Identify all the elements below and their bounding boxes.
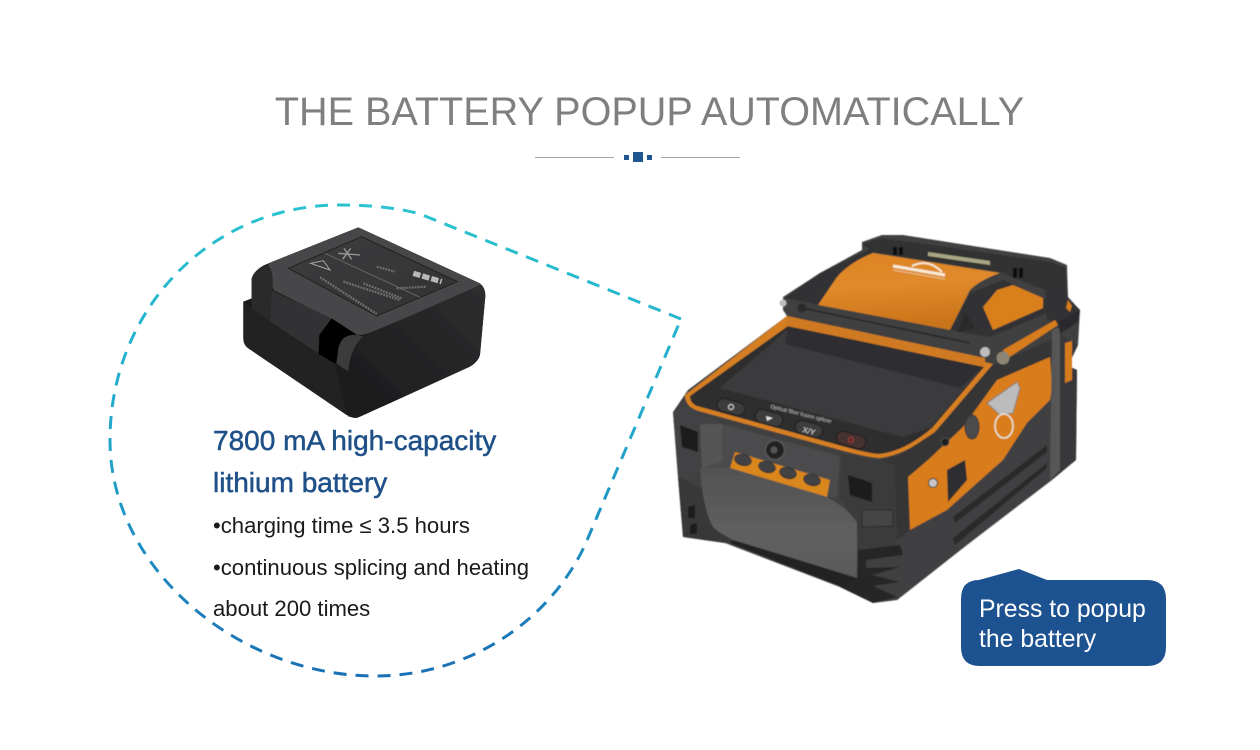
orange bezel edge bbox=[685, 316, 993, 458]
callout: press to popup: the battery bbox=[979, 626, 1097, 653]
lower right grip ribs bbox=[840, 545, 903, 603]
battery specification list bbox=[213, 513, 529, 621]
fusion splicer device photo bbox=[673, 235, 1080, 603]
right cover latch bbox=[950, 280, 1047, 337]
battery heading: 7800 mA high-capacity bbox=[213, 425, 496, 456]
housing slots bbox=[953, 445, 1047, 545]
callout: press to popup: Press to popup bbox=[979, 596, 1146, 623]
vertical strap bbox=[1050, 327, 1060, 480]
battery door bbox=[700, 468, 857, 578]
rear right block bbox=[1045, 285, 1080, 325]
callout: press to popup bbox=[961, 569, 1166, 666]
push latch bbox=[947, 460, 967, 502]
battery specification list: •continuous splicing and heating bbox=[213, 555, 529, 580]
metal clasp bbox=[987, 382, 1020, 438]
orange cover bbox=[818, 253, 1000, 330]
screen buttons bbox=[716, 397, 867, 450]
lower right housing bbox=[897, 400, 1052, 600]
side connector bbox=[965, 415, 979, 439]
right side upper orange strip bbox=[1003, 320, 1058, 358]
side dark band corner bbox=[880, 340, 1052, 540]
hinge screws bbox=[996, 352, 1010, 364]
orange key strip bbox=[730, 452, 830, 497]
hinge bar bbox=[783, 298, 982, 362]
left corner bumper bbox=[673, 405, 722, 480]
camera lens bbox=[766, 440, 784, 460]
orange side panel bbox=[908, 357, 1052, 530]
fusion splicer device photo: Optical fiber fusion splicer bbox=[770, 404, 832, 425]
left grip bbox=[678, 477, 733, 543]
dashed teardrop outline bbox=[110, 205, 681, 676]
display bezel bbox=[690, 326, 984, 454]
right corner bumper bbox=[840, 454, 900, 550]
battery specification list: about 200 times bbox=[213, 596, 370, 621]
orange band above screen bbox=[787, 316, 985, 366]
battery heading bbox=[213, 425, 496, 498]
screen bbox=[720, 329, 983, 437]
device body silhouette bbox=[673, 235, 1080, 603]
battery specification list: •charging time ≤ 3.5 hours bbox=[213, 513, 470, 538]
battery heading: lithium battery bbox=[213, 467, 387, 498]
front face band bbox=[700, 418, 840, 497]
battery photo bbox=[243, 227, 485, 418]
cover shoulder bbox=[785, 248, 873, 305]
title: THE BATTERY POPUP AUTOMATICALLY bbox=[275, 90, 1024, 134]
logo on cover bbox=[893, 263, 945, 279]
title divider ornament bbox=[535, 152, 740, 162]
fusion splicer device photo: X/Y bbox=[801, 425, 817, 437]
rear rail bbox=[862, 238, 1066, 290]
